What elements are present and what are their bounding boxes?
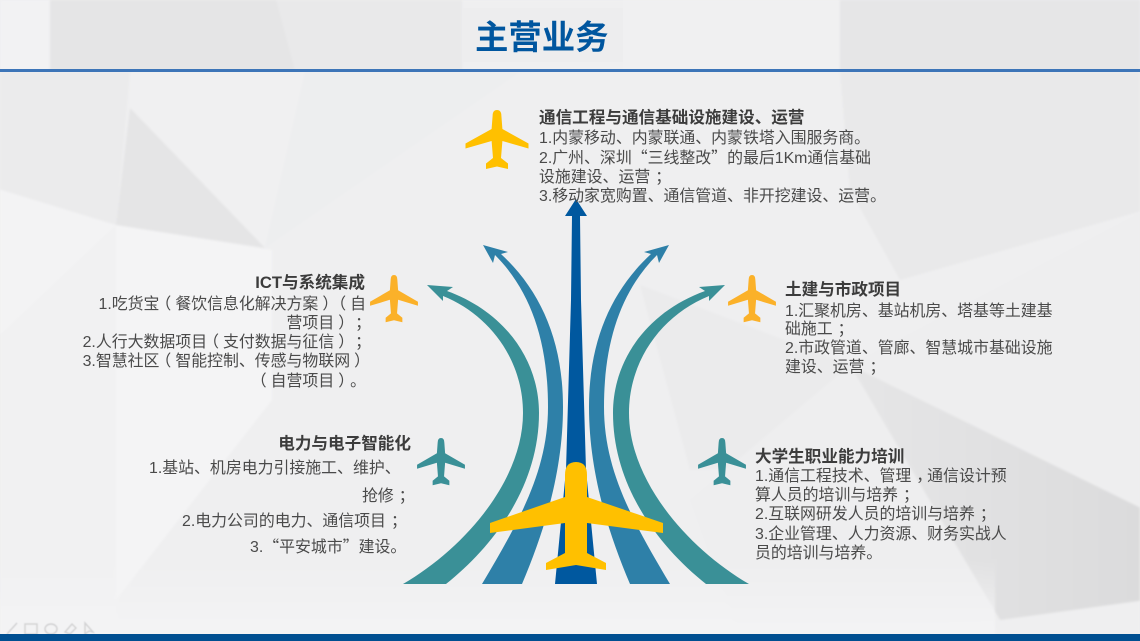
- icon: large yellow plane: [490, 462, 663, 570]
- text block: electrical: 2.电力公司的电力、通信项目 ；: [182, 508, 407, 531]
- title background panel: [462, 8, 623, 62]
- text block: civil engineering: [785, 280, 1053, 377]
- text block: telecom engineering: 1.内蒙移动、内蒙联通、内蒙铁塔入围服务商。: [539, 130, 870, 147]
- text block: electrical: 3.“平安城市”建设。: [250, 534, 406, 557]
- header rule: [0, 69, 1140, 72]
- text block: ICT: ICT与系统集成: [255, 273, 365, 292]
- text block: electrical: 1.基站、机房电力引接施工、维护、: [149, 460, 401, 477]
- icon: teal plane right: [698, 438, 746, 485]
- text block: electrical: 电力与电子智能化: [278, 434, 411, 453]
- text block: telecom engineering: [539, 108, 886, 205]
- text block: electrical: 抢修 ；: [362, 483, 415, 506]
- text block: training: 2.互联网研发人员的培训与培养 ；: [755, 501, 996, 524]
- arrow: inner right: [589, 245, 670, 584]
- text block: civil engineering: 础施工 ；: [785, 316, 854, 339]
- text block: ICT: 2.人行大数据项目（ 支付数据与征信 ）；: [83, 329, 371, 352]
- text block: telecom engineering: 通信工程与通信基础设施建设、运营: [539, 108, 804, 127]
- text block: civil engineering: 建设、运营 ；: [785, 354, 885, 377]
- icon: faint slideshow toolbar: [6, 622, 94, 634]
- icon: orange plane left: [370, 275, 418, 322]
- arrow: inner left: [482, 245, 563, 584]
- text block: ICT: [83, 273, 371, 391]
- text block: training: [755, 447, 1007, 562]
- text block: civil engineering: 2.市政管道、管廊、智慧城市基础设施: [785, 340, 1053, 357]
- text block: training: 1.通信工程技术、管理 ，通信设计预: [755, 463, 1007, 486]
- title: 主营业务: [475, 20, 609, 57]
- text block: telecom engineering: 3.移动家宽购置、通信管道、非开挖建设、运营。: [539, 188, 886, 205]
- text block: electrical: [149, 434, 415, 557]
- text block: ICT: 1.吃货宝（ 餐饮信息化解决方案 ）（ 自: [98, 291, 366, 314]
- text block: training: 员的培训与培养。: [755, 545, 882, 562]
- text block: ICT: （ 自营项目 ）。: [251, 368, 366, 391]
- text block: telecom engineering: 设施建设、运营 ；: [539, 164, 671, 187]
- icon: orange plane right: [728, 275, 776, 322]
- text block: telecom engineering: 2.广州、深圳“三线整改”的最后1Km通信基础: [539, 145, 871, 168]
- text block: training: 大学生职业能力培训: [755, 447, 904, 466]
- icon: teal plane left: [417, 438, 465, 485]
- icon: top plane: [466, 110, 528, 169]
- text block: training: 3.企业管理、人力资源、财务实战人: [755, 526, 1007, 543]
- arrow: outer left: [403, 285, 539, 584]
- arrow: centre: [555, 199, 597, 584]
- text block: civil engineering: 1.汇聚机房、基站机房、塔基等土建基: [785, 303, 1053, 320]
- text block: ICT: 营项目 ）；: [287, 310, 371, 333]
- text block: ICT: 3.智慧社区（ 智能控制、传感与物联网 ）: [83, 348, 370, 371]
- text block: training: 算人员的培训与培养 ；: [755, 482, 919, 505]
- footer bar: [0, 634, 1140, 641]
- text block: civil engineering: 土建与市政项目: [785, 280, 901, 299]
- arrow: outer right: [613, 285, 749, 584]
